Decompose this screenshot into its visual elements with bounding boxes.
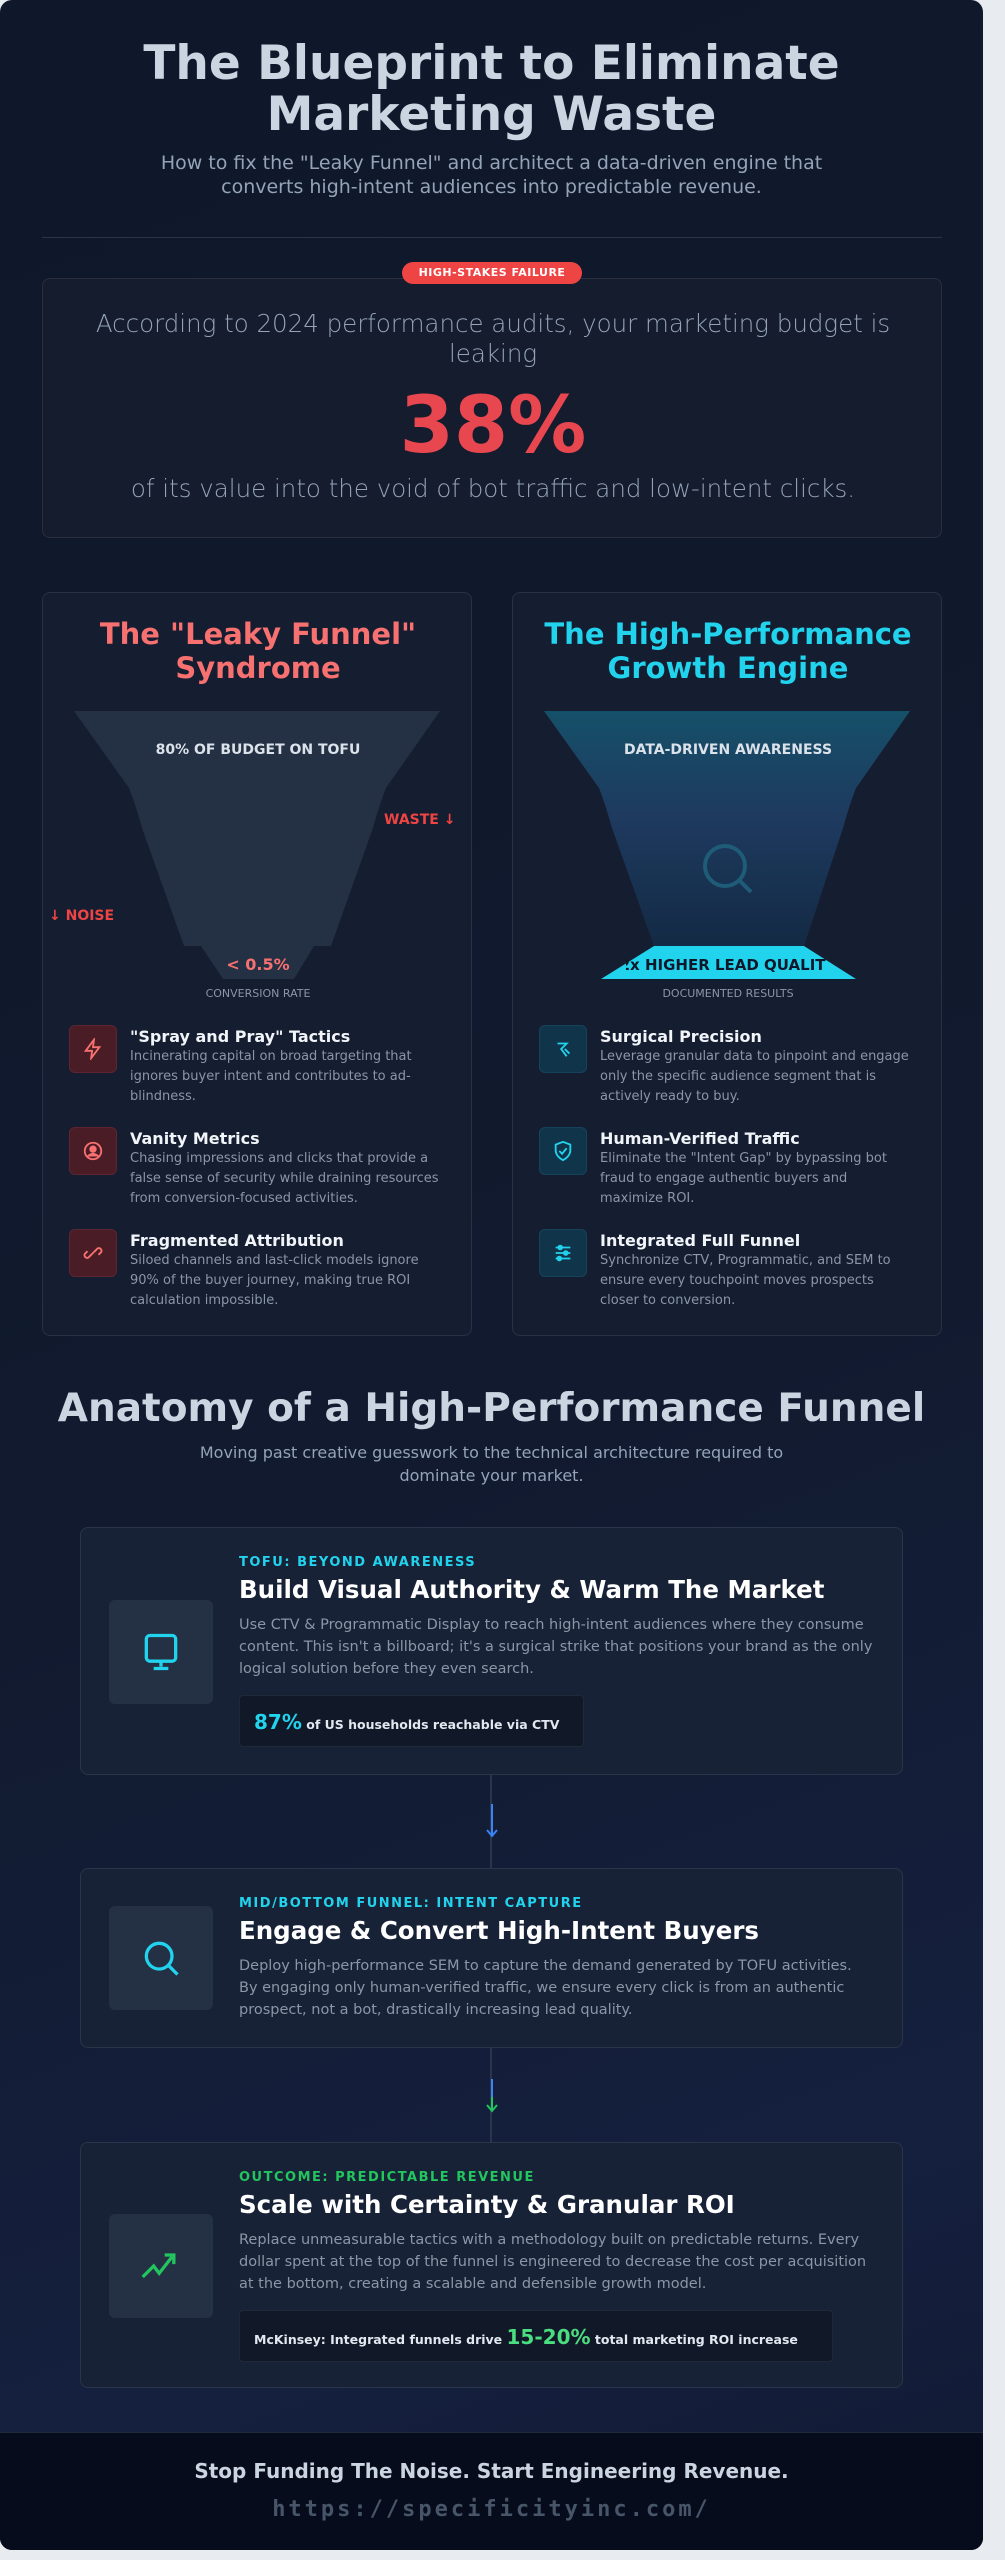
funnel chart: leaky: 80% OF BUDGET ON TOFU — [156, 742, 360, 758]
item: surgical precision: Leverage granular data to pinpoint and engage only the specific audience segment that is actively ready to buy. — [600, 1049, 909, 1104]
panel title: Growth Engine — [608, 651, 848, 685]
funnel chart: growth: 2x HIGHER LEAD QUALITY — [620, 956, 838, 974]
footer — [0, 2432, 983, 2550]
funnel chart: leaky: CONVERSION RATE — [206, 987, 310, 1000]
badge — [402, 262, 582, 284]
item: spray and pray: Incinerating capital on broad targeting that ignores buyer intent and contributes to ad-blindness. — [130, 1049, 412, 1104]
icon: shield — [539, 1127, 587, 1175]
item: human-verified: Human-Verified Traffic — [600, 1129, 800, 1148]
item: human-verified: Eliminate the "Intent Gap" by bypassing bot fraud to engage authentic buyers and maximize ROI. — [600, 1151, 887, 1206]
item: fragmented attribution: Fragmented Attribution — [130, 1231, 344, 1250]
icon: broken link — [69, 1229, 117, 1277]
card: outcome: Replace unmeasurable tactics with a methodology built on predictable returns. Every dollar spent at the top of the funnel is engineered to decrease the cost per acquisition at the bottom, creating a scalable and defensible growth model. — [239, 2232, 866, 2292]
item: surgical precision: Surgical Precision — [600, 1027, 762, 1046]
title — [143, 36, 840, 142]
card: mid/bottom — [80, 1868, 903, 2048]
arrow 1 — [486, 1804, 498, 1838]
item: vanity metrics — [69, 1127, 439, 1206]
icon: sliders — [539, 1229, 587, 1277]
panel: growth engine — [512, 592, 942, 1336]
funnel chart: leaky — [49, 711, 455, 1000]
panel title — [100, 617, 416, 685]
item: vanity metrics: Chasing impressions and clicks that provide a false sense of security while draining resources from conversion-focused activities. — [130, 1151, 439, 1206]
funnel chart: growth — [544, 711, 910, 1000]
arrow 2 — [486, 2079, 498, 2112]
stat intro text: According to 2024 performance audits, your marketing budget is leaking — [96, 309, 890, 368]
funnel chart: growth: DATA-DRIVEN AWARENESS — [624, 742, 832, 758]
item: integrated: Integrated Full Funnel — [600, 1231, 800, 1250]
card: mid/bottom: Deploy high-performance SEM to capture the demand generated by TOFU activities. By engaging only human-verified traffic, we ensure every click is from an authentic prospect, not a bot, drastically increasing lead quality. — [239, 1958, 852, 2018]
panel title: Syndrome — [175, 651, 341, 685]
panel: leaky funnel — [42, 592, 472, 1336]
card: TOFU: Build Visual Authority & Warm The Market — [239, 1575, 824, 1604]
item: vanity metrics: Vanity Metrics — [130, 1129, 260, 1148]
icon: lightning — [69, 1025, 117, 1073]
stat callout — [239, 1695, 584, 1747]
title: The Blueprint to Eliminate — [143, 36, 840, 91]
panel title — [544, 617, 912, 685]
footer url: https://specificityinc.com/ — [272, 2497, 711, 2522]
big number: 38% — [400, 381, 586, 471]
funnel chart: leaky: WASTE ↓ — [384, 812, 455, 828]
subtitle: How to fix the "Leaky Funnel" and architect a data-driven engine that — [161, 152, 822, 174]
card: mid/bottom: MID/BOTTOM FUNNEL: INTENT CAPTURE — [239, 1896, 583, 1911]
badge: HIGH-STAKES FAILURE — [419, 266, 565, 279]
footer tagline: Stop Funding The Noise. Start Engineering Revenue. — [194, 2459, 789, 2483]
stat card: 38% — [42, 278, 942, 538]
stat callout — [239, 2310, 833, 2362]
card: TOFU — [80, 1527, 903, 1775]
section subtitle: Moving past creative guesswork to the technical architecture required to — [200, 1443, 783, 1462]
section subtitle — [200, 1443, 783, 1485]
card: TOFU: Use CTV & Programmatic Display to reach high-intent audiences where they consume content. This isn't a billboard; it's a surgical strike that positions your brand as the only logical solution before they even search. — [239, 1617, 872, 1677]
funnel chart: leaky: < 0.5% — [226, 955, 290, 974]
icon: monitor — [109, 1600, 213, 1704]
panel title: The "Leaky Funnel" — [100, 617, 416, 651]
item: human-verified — [539, 1127, 887, 1206]
item: fragmented attribution — [69, 1229, 419, 1308]
subtitle: converts high-intent audiences into predictable revenue. — [221, 176, 762, 198]
stat callout: 87% of US households reachable via CTV — [254, 1710, 559, 1734]
stat outro text: of its value into the void of bot traffic and low-intent clicks. — [131, 474, 855, 503]
icon: user — [69, 1127, 117, 1175]
item: spray and pray — [69, 1025, 412, 1104]
section heading: Anatomy of a High-Performance Funnel — [58, 1386, 925, 1431]
funnel chart: leaky: ↓ NOISE — [49, 908, 114, 924]
card: outcome — [80, 2142, 903, 2388]
card: outcome: Scale with Certainty & Granular ROI — [239, 2190, 735, 2219]
item: spray and pray: "Spray and Pray" Tactics — [130, 1027, 350, 1046]
item: integrated — [539, 1229, 891, 1308]
subtitle — [161, 152, 822, 198]
item: integrated: Synchronize CTV, Programmatic, and SEM to ensure every touchpoint moves prospects closer to conversion. — [600, 1253, 891, 1308]
item: fragmented attribution: Siloed channels and last-click models ignore 90% of the buyer journey, making true ROI calculation impossible. — [130, 1253, 419, 1308]
icon: trend — [109, 2214, 213, 2318]
icon: target — [539, 1025, 587, 1073]
card: TOFU: TOFU: BEYOND AWARENESS — [239, 1555, 476, 1570]
panel title: The High-Performance — [544, 617, 912, 651]
title: Marketing Waste — [267, 87, 716, 142]
item: surgical precision — [539, 1025, 909, 1104]
card: mid/bottom: Engage & Convert High-Intent Buyers — [239, 1916, 759, 1945]
funnel chart: growth: DOCUMENTED RESULTS — [662, 987, 794, 1000]
section subtitle: dominate your market. — [399, 1466, 584, 1485]
card: outcome: OUTCOME: PREDICTABLE REVENUE — [239, 2170, 535, 2185]
stat callout: McKinsey: Integrated funnels drive 15-20% total marketing ROI increase — [254, 2325, 798, 2349]
icon: search — [109, 1906, 213, 2010]
